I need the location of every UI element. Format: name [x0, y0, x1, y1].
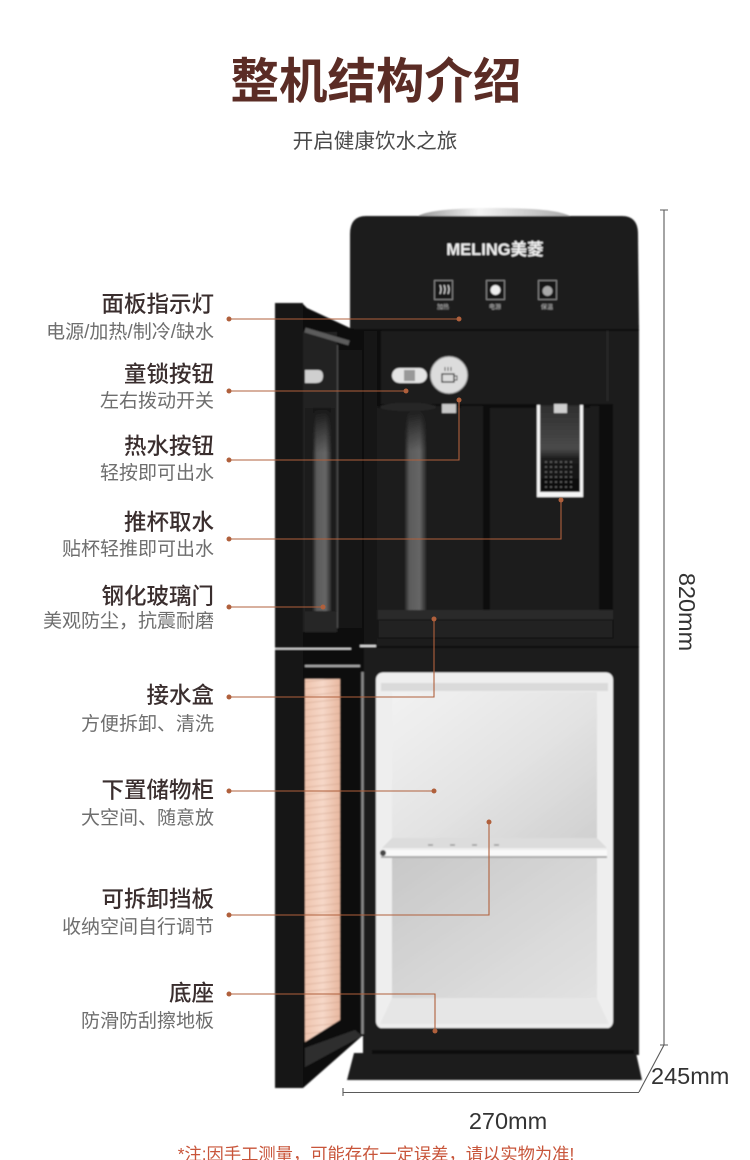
subtitle: 开启健康饮水之旅	[293, 130, 457, 153]
dimension lines	[343, 210, 668, 1096]
right side edge	[607, 331, 608, 401]
label: drip box: 接水盒	[146, 683, 214, 708]
base	[347, 1028, 642, 1080]
label: hot water button	[100, 434, 214, 484]
drip tray	[378, 610, 613, 638]
brand logo: MELING美菱	[446, 239, 544, 259]
label: storage cabinet: 下置储物柜	[101, 778, 214, 803]
label: glass door: 钢化玻璃门	[101, 584, 214, 609]
label: hot water button: 轻按即可出水	[100, 462, 214, 484]
indicator icons: 电源	[489, 303, 501, 311]
top lid	[418, 208, 570, 216]
label: shelf: 收纳空间自行调节	[62, 916, 214, 938]
indicator icons: 保温	[541, 303, 553, 311]
label: shelf	[62, 887, 214, 938]
label: panel indicator: 电源/加热/制冷/缺水	[46, 321, 214, 343]
door copper insulation panel	[305, 679, 340, 1042]
label: shelf: 可拆卸挡板	[101, 887, 214, 912]
control panel head	[350, 216, 639, 330]
indicator icons	[434, 280, 556, 311]
dimension: width: 270mm	[469, 1108, 547, 1134]
hot water button	[430, 356, 468, 394]
push-cup dispensing paddle	[537, 404, 583, 497]
label: base: 底座	[169, 981, 214, 1006]
label: child lock: 左右拨动开关	[100, 390, 214, 412]
dimension: depth: 245mm	[651, 1063, 729, 1089]
label: push cup	[62, 510, 214, 560]
indicator icons: 加热	[437, 303, 449, 311]
label: drip box: 方便拆卸、清洗	[81, 713, 214, 735]
lower storage cabinet	[376, 672, 613, 1028]
upper recess	[378, 404, 613, 611]
water dispenser illustration	[275, 208, 642, 1088]
label: drip box	[81, 683, 214, 735]
label: push cup: 推杯取水	[124, 510, 214, 535]
label: child lock	[100, 362, 214, 412]
label: storage cabinet	[81, 778, 214, 829]
main body	[363, 325, 639, 1055]
label: panel indicator	[46, 292, 214, 343]
hot water nozzle	[442, 404, 456, 413]
dimension: height: 820mm	[674, 573, 700, 651]
open glass door	[275, 303, 376, 1088]
label: storage cabinet: 大空间、随意放	[81, 807, 214, 829]
door bottom tray	[305, 1030, 362, 1067]
door cylinder	[305, 408, 335, 611]
door lock tab	[305, 370, 323, 383]
label: glass door	[43, 584, 214, 632]
leader lines	[226, 316, 564, 1034]
label: panel indicator: 面板指示灯	[101, 292, 214, 317]
child lock slider	[392, 368, 427, 383]
label: glass door: 美观防尘，抗震耐磨	[43, 610, 214, 632]
label: base: 防滑防刮擦地板	[81, 1010, 214, 1032]
water cylinder	[390, 406, 458, 611]
label: base	[81, 981, 214, 1032]
label: child lock: 童锁按钮	[124, 362, 214, 387]
title: 整机结构介绍	[230, 55, 522, 109]
label: push cup: 贴杯轻推即可出水	[62, 538, 214, 560]
label: hot water button: 热水按钮	[124, 434, 214, 459]
shelf	[380, 838, 607, 858]
left frame strip	[363, 331, 377, 646]
